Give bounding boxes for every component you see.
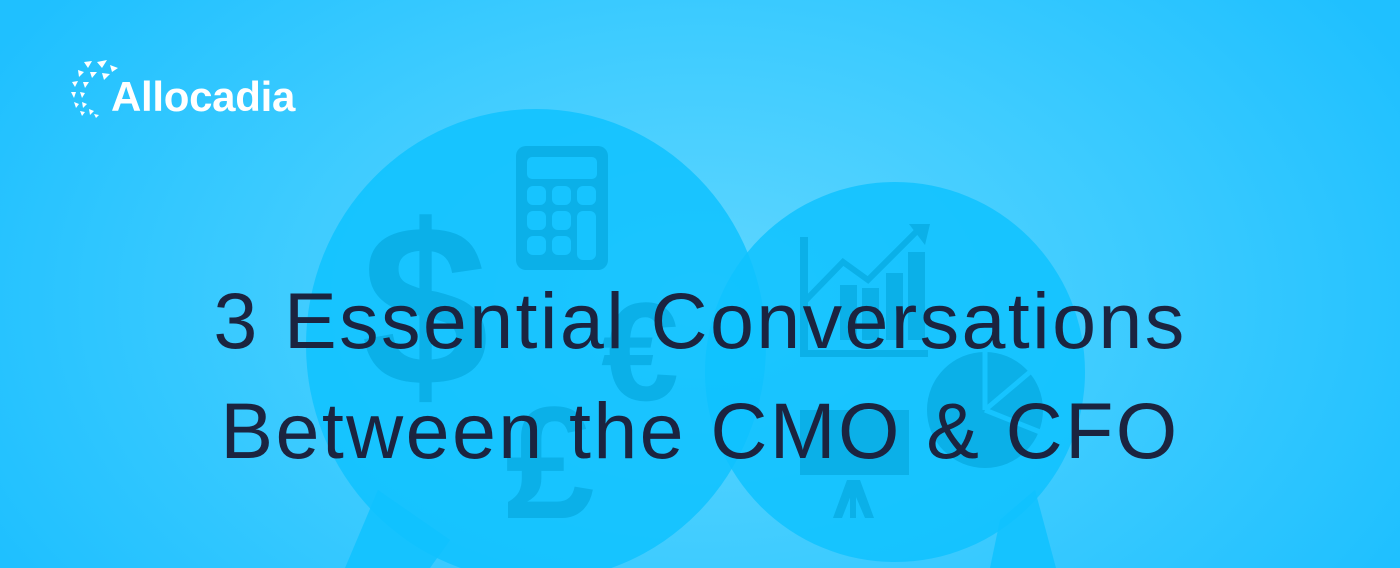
icon: pie chart	[927, 348, 1043, 468]
right speech bubble	[705, 182, 1085, 568]
title: 3 Essential Conversations	[213, 276, 1187, 365]
icon: dollar sign: $	[361, 177, 489, 434]
icon: growth chart	[800, 224, 930, 357]
icon: euro sign: €	[601, 273, 679, 430]
icon: pound sign: £	[506, 373, 594, 552]
title	[213, 276, 1187, 475]
text: Allocadia wordmark: Allocadia	[111, 73, 295, 120]
icon: presentation board	[800, 410, 909, 518]
icon: calculator	[516, 146, 608, 270]
icon: logo triangles	[71, 60, 118, 118]
logo: Allocadia	[71, 60, 296, 120]
title: Between the CMO & CFO	[220, 386, 1180, 475]
left speech bubble	[306, 109, 766, 568]
